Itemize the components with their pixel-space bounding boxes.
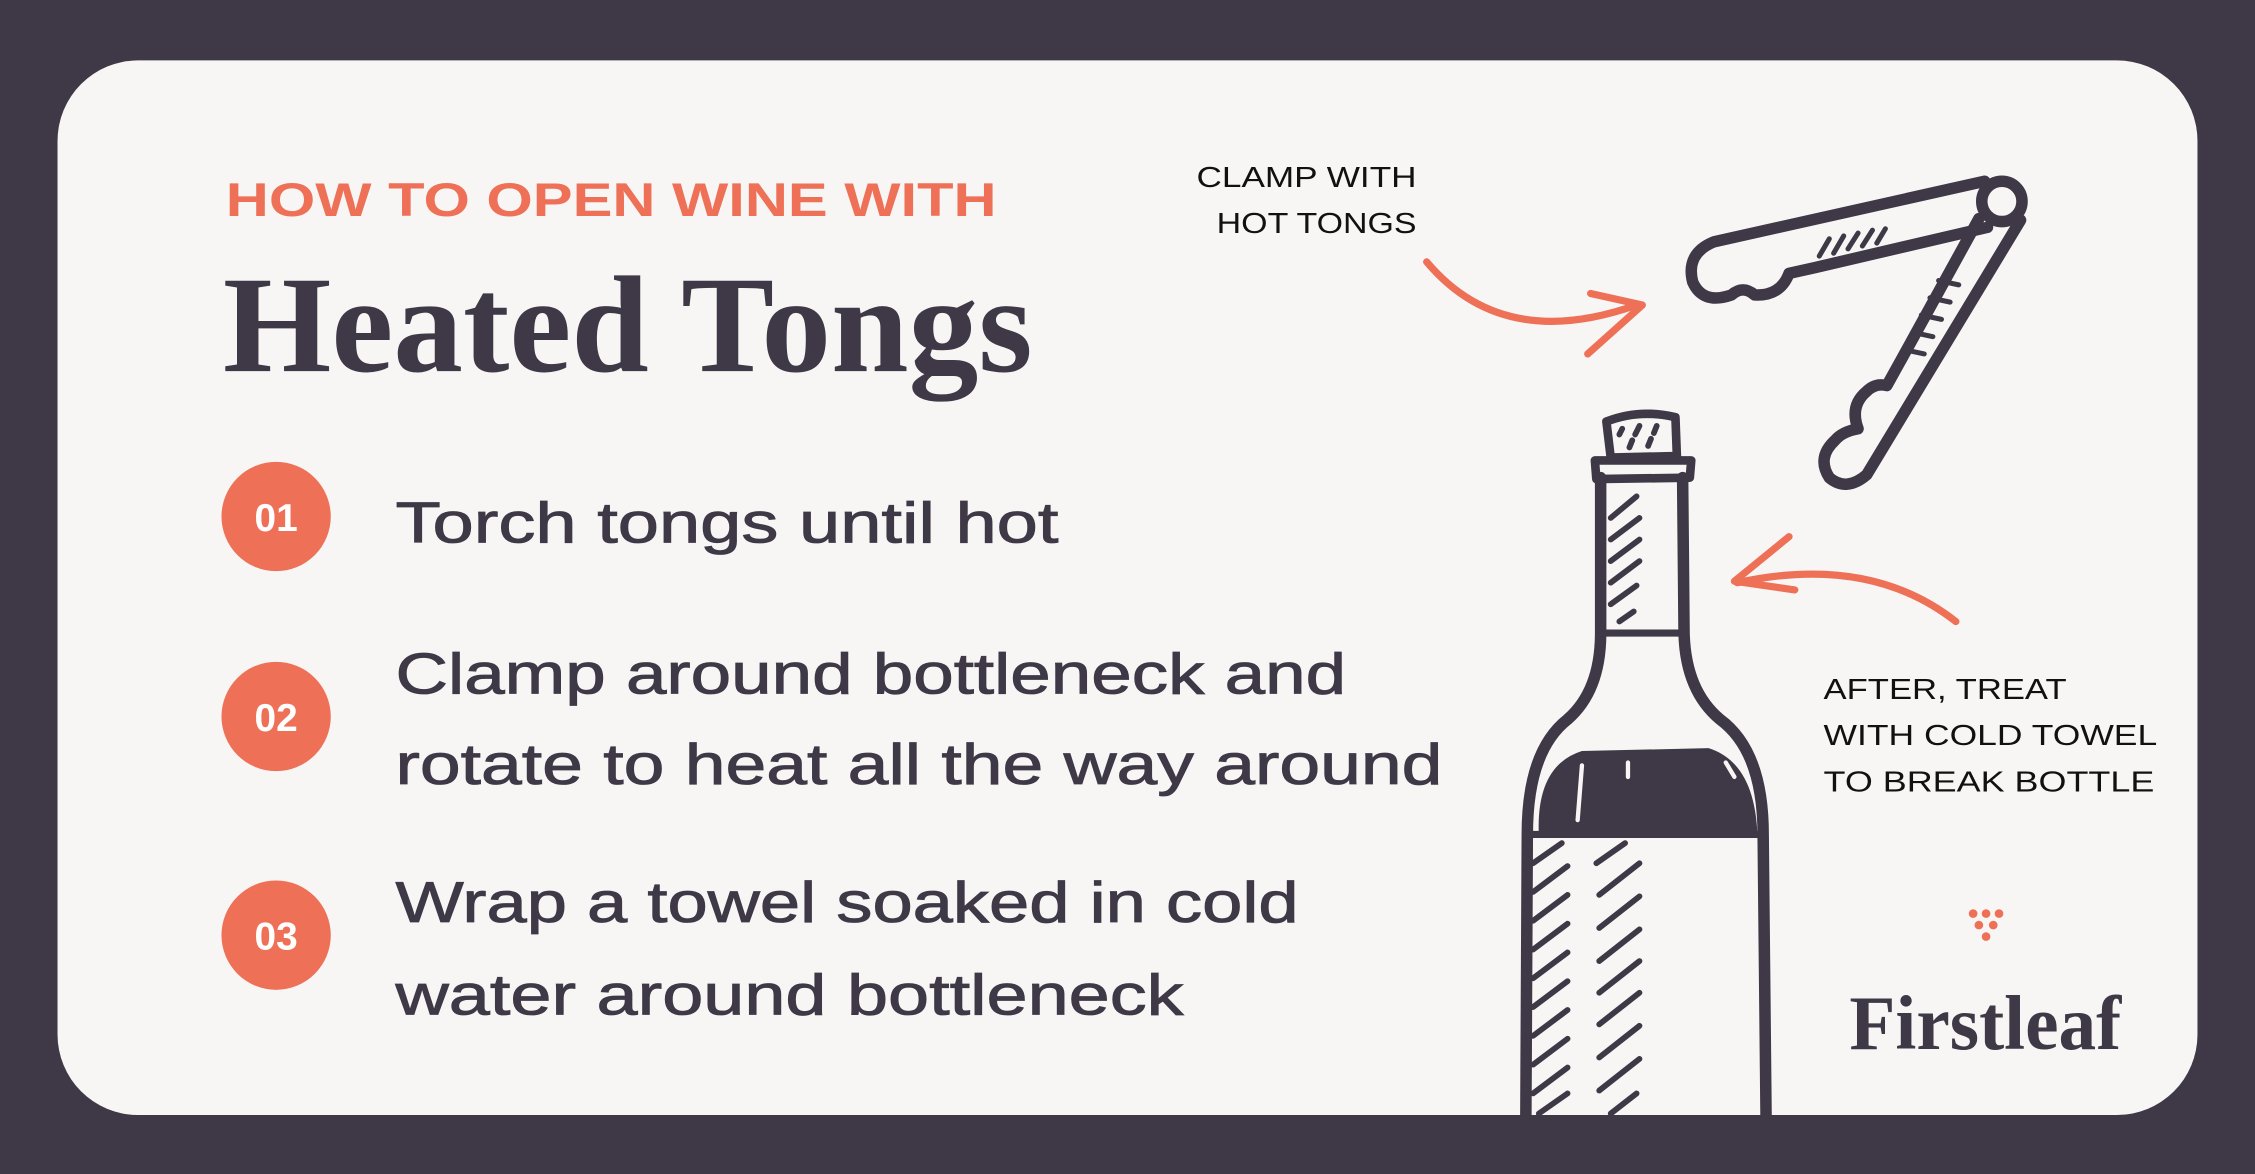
icon: number 01 — [221, 462, 331, 571]
callout: after treat with cold towel: WITH COLD TOWEL — [1824, 720, 2157, 752]
step 1 text: Torch tongs until hot — [395, 491, 1058, 555]
step 3 text: Wrap a towel soaked in cold — [395, 871, 1299, 935]
step 2 text: Clamp around bottleneck and — [395, 642, 1346, 706]
callout: clamp with hot tongs: CLAMP WITH — [1197, 162, 1417, 194]
icon: number 03: 03 — [255, 916, 298, 959]
step 2 text — [395, 642, 1442, 797]
step 3 text — [394, 871, 1299, 1027]
step 3 text: water around bottleneck — [394, 963, 1184, 1027]
step 2 — [221, 642, 1442, 797]
icon: number 02 — [221, 662, 331, 771]
step 1 — [221, 462, 1058, 571]
icon: wine bottle — [1526, 414, 1766, 1115]
step 2 text: rotate to heat all the way around — [395, 733, 1442, 797]
arrow: to bottleneck — [1734, 537, 1956, 622]
logo — [1849, 909, 2122, 1066]
step 3 — [221, 871, 1299, 1027]
arrow: to tongs — [1427, 262, 1642, 354]
title: Heated Tongs — [223, 248, 1033, 401]
icon: grapes — [1969, 909, 2003, 941]
callout: clamp with hot tongs: HOT TONGS — [1217, 208, 1417, 240]
icon: number 02: 02 — [255, 697, 298, 740]
callout: after treat with cold towel: AFTER, TREAT — [1824, 674, 2067, 706]
callout: clamp with hot tongs — [1197, 162, 1417, 240]
logo text: Firstleaf — [1849, 980, 2122, 1066]
icon: tongs — [1691, 181, 2022, 484]
icon: number 03 — [221, 880, 331, 990]
callout: after treat with cold towel: TO BREAK BOTTLE — [1824, 766, 2154, 798]
icon: number 01: 01 — [255, 497, 298, 540]
subtitle: HOW TO OPEN WINE WITH — [226, 174, 997, 227]
callout: after treat with cold towel — [1824, 674, 2157, 798]
